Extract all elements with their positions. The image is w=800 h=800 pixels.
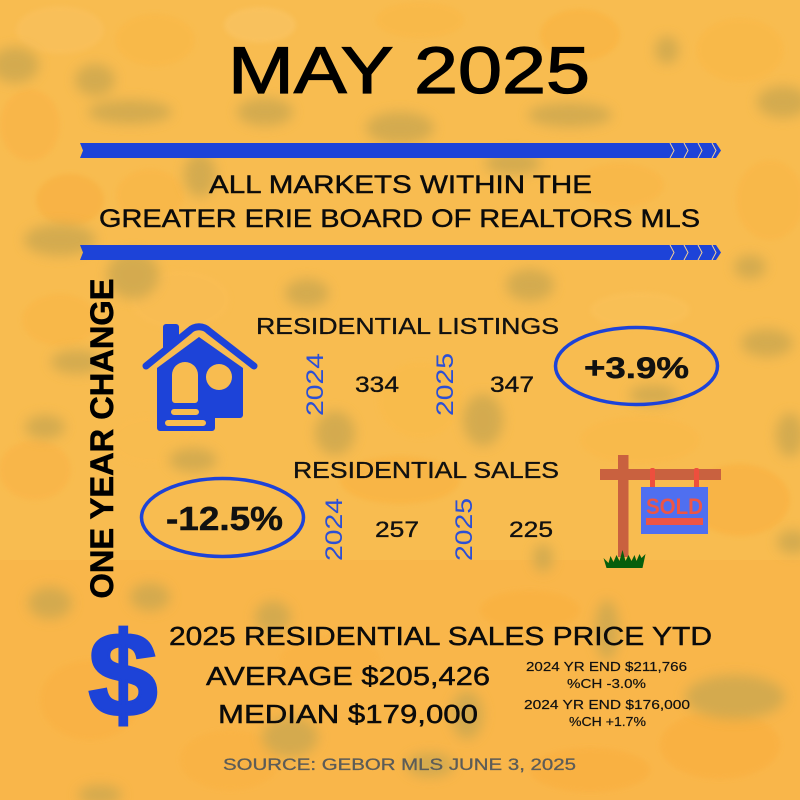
listings heading: RESIDENTIAL LISTINGS [256,313,559,339]
sales 2024 value: 2024 [321,498,348,561]
median comparison note: 2024 YR END $176,000 [524,697,690,712]
title: MAY 2025 [228,33,590,107]
median price: MEDIAN $179,000 [218,699,478,729]
sales 2024 value [321,498,419,561]
listings 2025 value: 2025 [432,353,459,416]
icon: house [146,324,254,431]
callout: sales change [142,478,304,556]
average comparison note: 2024 YR END $211,766 [526,659,687,674]
callout: listings change [556,328,718,404]
subtitle [99,171,700,233]
callout: sales change: -12.5% [166,500,283,537]
sales 2025 value [451,498,553,561]
listings 2025 value [432,353,534,416]
sales heading: RESIDENTIAL SALES [293,457,559,483]
callout: listings change: +3.9% [584,352,689,385]
average comparison note: %CH -3.0% [567,676,646,691]
sales 2024 value: 257 [375,517,419,542]
icon: sold sign [600,455,721,568]
icon: sold sign: SOLD [646,494,703,519]
top arrow divider [80,143,721,158]
subtitle: GREATER ERIE BOARD OF REALTORS MLS [99,205,700,233]
side label: one year change: ONE YEAR CHANGE [84,278,120,598]
median comparison note [524,697,690,729]
icon: dollar sign: $ [88,608,158,742]
subtitle: ALL MARKETS WITHIN THE [209,171,592,199]
listings 2024 value [302,353,399,416]
sales 2025 value: 2025 [451,498,478,561]
sales 2025 value: 225 [509,517,553,542]
listings 2025 value: 347 [490,372,534,397]
listings 2024 value: 334 [355,372,399,397]
bottom arrow divider [80,245,721,260]
listings 2024 value: 2024 [302,353,329,416]
source line: SOURCE: GEBOR MLS JUNE 3, 2025 [223,755,576,774]
average price: AVERAGE $205,426 [206,661,490,691]
average comparison note [526,659,687,691]
price heading: 2025 RESIDENTIAL SALES PRICE YTD [169,621,712,651]
median comparison note: %CH +1.7% [569,714,646,729]
